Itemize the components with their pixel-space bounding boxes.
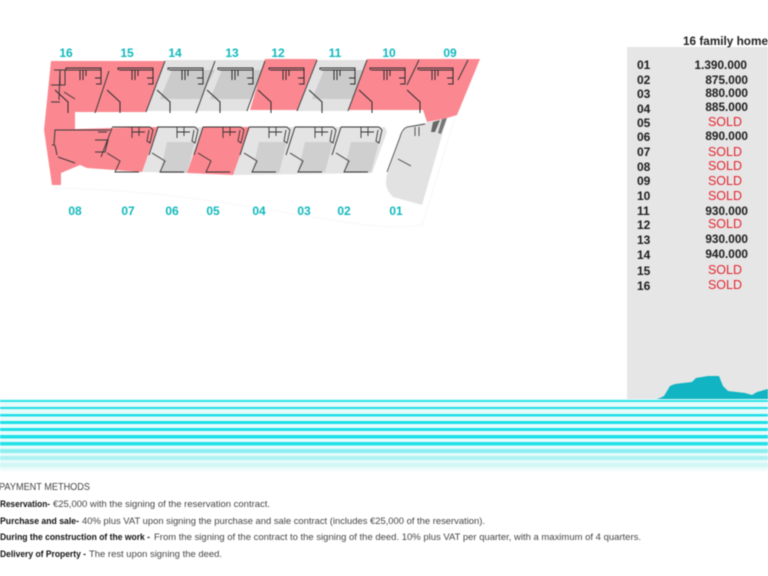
grey homes, top row [146,60,367,111]
house numbers: 10 [637,189,651,203]
house numbers: 09 [637,174,651,188]
house number labels, bottom: 02 [337,204,351,218]
sold markers: SOLD [708,263,742,277]
prices: 880.000 [705,86,748,100]
prices: 940.000 [705,247,748,261]
construction: During the construction of the work - [0,532,150,543]
house numbers: 12 [637,218,651,232]
house numbers: 05 [637,116,651,130]
house number labels, bottom: 01 [389,204,403,218]
sold markers: SOLD [708,217,742,231]
house number labels, top: 15 [120,46,134,60]
panel background [627,47,768,400]
floor plan lines [51,60,468,172]
sold markers: SOLD [708,278,742,292]
house number labels, bottom: 06 [165,204,179,218]
sea stripes [0,399,768,471]
house number labels, top: 12 [271,46,285,60]
house numbers: 14 [637,248,651,262]
prices [695,58,748,261]
reservation: Reservation- [0,499,50,510]
house number labels, top [59,46,457,60]
payment methods [0,482,641,560]
purchase and sale: Purchase and sale- [0,516,79,527]
house numbers: 13 [637,233,651,247]
house number labels, bottom [68,204,403,218]
sold markers: SOLD [708,145,742,159]
faint site outline [55,70,470,227]
sold markers: SOLD [708,115,742,129]
prices: 1.390.000 [695,58,747,72]
house numbers: 11 [637,204,650,218]
prices: 930.000 [705,204,748,218]
prices: 875.000 [705,73,748,87]
site plan [44,46,480,227]
house number labels, bottom: 05 [206,204,220,218]
house number labels, bottom: 07 [121,204,135,218]
sold markers [708,115,742,292]
delivery: Delivery of Property - [0,549,86,560]
house numbers: 02 [637,73,651,87]
house numbers: 01 [637,58,651,72]
prices: 930.000 [705,232,748,246]
house numbers: 07 [637,145,651,159]
house number labels, bottom: 08 [68,204,82,218]
house numbers: 15 [637,264,651,278]
delivery [0,549,222,560]
payment heading: PAYMENT METHODS [0,482,90,493]
house numbers: 04 [637,102,651,116]
house number labels, bottom: 04 [252,204,266,218]
house number labels, top: 13 [225,46,239,60]
house number labels, bottom: 03 [297,204,311,218]
price panel [627,36,768,400]
house numbers: 03 [637,87,651,101]
house numbers [637,58,651,293]
sold homes in red [44,59,480,185]
house number labels, top: 14 [168,46,182,60]
home 01 [386,118,447,205]
house numbers: 16 [637,279,651,293]
sold markers: SOLD [708,159,742,173]
house number labels, top: 11 [329,46,342,60]
house number labels, top: 10 [382,46,396,60]
sold markers: SOLD [708,174,742,188]
panel heading: 16 family home [683,36,768,48]
house number labels, top: 09 [443,46,457,60]
sold markers: SOLD [708,189,742,203]
grey homes, bottom row [142,127,387,175]
prices: 890.000 [705,129,748,143]
house numbers: 06 [637,130,651,144]
house number labels, top: 16 [59,46,73,60]
island silhouette [653,376,768,400]
prices: 885.000 [705,100,748,114]
house numbers: 08 [637,160,651,174]
purchase and sale: 40% plus VAT upon signing the purchase and sale contract (includes €25,000 of the reservation). [82,516,485,527]
construction: From the signing of the contract to the signing of the deed. 10% plus VAT per quarter, with a maximum of 4 quarters. [154,532,641,543]
delivery: The rest upon signing the deed. [89,549,222,560]
reservation: €25,000 with the signing of the reservation contract. [53,499,270,510]
